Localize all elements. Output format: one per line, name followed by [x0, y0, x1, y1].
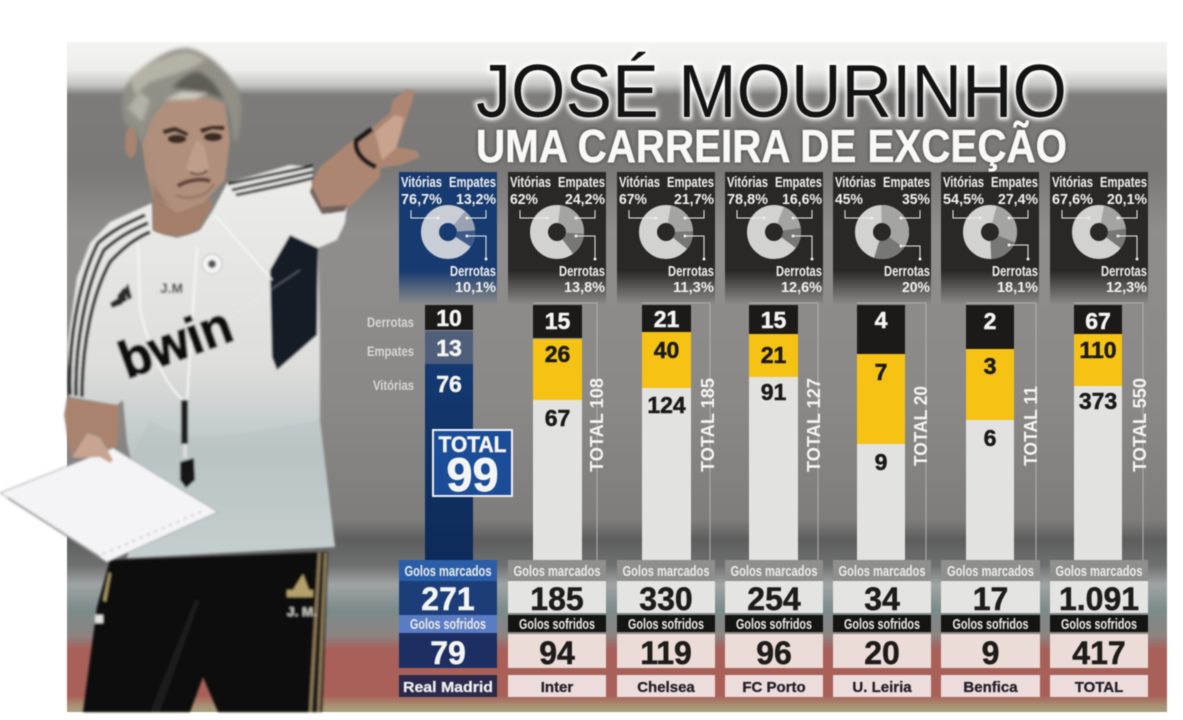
- column: Total donut panel: 20,1%: [1107, 192, 1147, 208]
- bar: FC Porto: TOTAL 127: [804, 378, 824, 472]
- bar: Real Madrid: 76: [436, 371, 462, 397]
- column: FC Porto donut panel: Empates: [775, 175, 822, 191]
- bar: U. Leiria: [857, 303, 931, 560]
- column: FC Porto donut panel: 12,6%: [781, 280, 822, 296]
- column: Chelsea donut panel: 11,3%: [673, 280, 714, 296]
- bar: Total: 67: [1085, 308, 1111, 334]
- goals table: Chelsea: Chelsea: [637, 679, 695, 696]
- column: FC Porto donut panel: 16,6%: [782, 192, 822, 208]
- bar: Benfica: [966, 303, 1041, 560]
- value: vitórias: 76,7%: [401, 192, 442, 208]
- total badge: TOTAL: [438, 432, 506, 457]
- column: Benfica donut panel: 54,5%: [943, 192, 984, 208]
- column: Chelsea donut panel: [617, 172, 715, 305]
- goals table: Total: 1.091: [1059, 581, 1139, 617]
- bar: U. Leiria: TOTAL 20: [911, 386, 931, 466]
- column: FC Porto donut panel: 78,8%: [727, 192, 768, 208]
- column: U. Leiria donut panel: Vitórias: [835, 175, 876, 191]
- photo: José Mourinho: [0, 48, 420, 712]
- column: Inter donut panel: Derrotas: [559, 264, 605, 280]
- bar: U. Leiria: 7: [875, 359, 887, 385]
- column: U. Leiria donut panel: 20%: [902, 280, 930, 296]
- goals table: Total: Golos marcados: [1056, 564, 1142, 580]
- shirt logos: [110, 283, 132, 308]
- column: Chelsea donut panel: 21,7%: [674, 192, 714, 208]
- goals table: Real Madrid: 79: [430, 635, 466, 671]
- hair: [122, 48, 241, 145]
- label: vitórias: Vitórias: [401, 175, 442, 191]
- bar: Total: [1074, 303, 1150, 560]
- goals table: Chelsea: Golos marcados: [622, 564, 710, 580]
- goals table: Inter: Golos sofridos: [519, 617, 595, 633]
- pants: J. M.: [287, 605, 317, 619]
- column: Chelsea donut panel: Vitórias: [619, 175, 660, 191]
- ear: [125, 126, 137, 158]
- goals table: FC Porto: Golos sofridos: [736, 617, 812, 633]
- goals table: Benfica: [941, 560, 1040, 697]
- column: U. Leiria donut panel: 45%: [835, 192, 863, 208]
- value: empates: 13,2%: [456, 192, 496, 208]
- bar: Chelsea: 124: [647, 392, 686, 418]
- total badge: [433, 430, 512, 501]
- column: U. Leiria donut panel: Derrotas: [884, 264, 930, 280]
- column: Real Madrid donut panel: [399, 172, 497, 305]
- title: JOSÉ MOURINHO: [476, 49, 1067, 133]
- column: Total donut panel: Derrotas: [1101, 264, 1147, 280]
- subtitle: UMA CARREIRA DE EXCEÇÃO: [476, 120, 1067, 172]
- shirt: bwin: [111, 296, 240, 390]
- goals table: Total: Golos sofridos: [1061, 617, 1137, 633]
- goals table: Real Madrid: 271: [421, 581, 475, 617]
- bar: FC Porto: [749, 303, 824, 560]
- shirt: [67, 165, 347, 558]
- column: Total donut panel: [1050, 172, 1148, 305]
- bar: Benfica: 6: [984, 425, 996, 451]
- goals table: FC Porto: 96: [756, 635, 792, 671]
- shirt: J.M: [160, 280, 183, 296]
- bar: Chelsea: 21: [654, 306, 679, 332]
- value: derrotas: 10,1%: [455, 280, 496, 296]
- goals table: Inter: 94: [539, 635, 575, 671]
- goals table: Benfica: 17: [973, 581, 1008, 617]
- bar: Real Madrid: 13: [436, 335, 462, 361]
- goals table: Chelsea: 330: [639, 581, 693, 617]
- column: Inter donut panel: 62%: [510, 192, 538, 208]
- column: Benfica donut panel: 18,1%: [997, 280, 1038, 296]
- goals table: Benfica: Golos sofridos: [952, 617, 1028, 633]
- column: U. Leiria donut panel: 35%: [902, 192, 930, 208]
- legend: derrotas, empates, vitórias: Empates: [367, 343, 414, 359]
- goals table: U. Leiria: Golos marcados: [838, 564, 926, 580]
- bar: Chelsea: 40: [654, 337, 679, 363]
- column: Benfica donut panel: 27,4%: [998, 192, 1038, 208]
- face: [142, 92, 230, 213]
- bar: Inter: 26: [545, 341, 570, 367]
- title: JOSÉ MOURINHO: [476, 49, 1067, 133]
- goals table: U. Leiria: 34: [864, 581, 900, 617]
- goals table: U. Leiria: U. Leiria: [852, 679, 912, 696]
- column: Total donut panel: 67,6%: [1052, 192, 1093, 208]
- bar: Chelsea: TOTAL 185: [698, 378, 718, 472]
- bar: FC Porto: 21: [761, 342, 786, 368]
- bar: Benfica: TOTAL 11: [1021, 386, 1041, 466]
- bar: U. Leiria: 4: [875, 307, 888, 333]
- goals table: Chelsea: [617, 560, 715, 697]
- bar: U. Leiria: 9: [875, 449, 887, 475]
- bar: Inter: 15: [545, 308, 570, 334]
- column: FC Porto donut panel: Derrotas: [776, 264, 822, 280]
- column: Benfica donut panel: Vitórias: [943, 175, 984, 191]
- bar: Real Madrid: [425, 305, 512, 560]
- column: Benfica donut panel: [941, 172, 1039, 305]
- label: empates: Empates: [449, 175, 496, 191]
- bar: Inter: 67: [545, 405, 570, 431]
- bar: FC Porto: 91: [761, 379, 786, 405]
- right arm and hand: [310, 89, 420, 214]
- goals table: Chelsea: 119: [640, 635, 692, 671]
- column: Chelsea donut panel: 67%: [619, 192, 647, 208]
- column: Benfica donut panel: Empates: [991, 175, 1038, 191]
- bar: FC Porto: 15: [761, 307, 786, 333]
- bar: Total: TOTAL 550: [1130, 378, 1150, 472]
- pants: [83, 552, 328, 712]
- bar: Inter: [533, 303, 607, 560]
- goals table: Chelsea: Golos sofridos: [628, 617, 704, 633]
- column: Total donut panel: Vitórias: [1052, 175, 1093, 191]
- goals table: Real Madrid: Golos sofridos: [410, 617, 486, 633]
- goals table: FC Porto: Golos marcados: [730, 564, 818, 580]
- column: Inter donut panel: [508, 172, 606, 305]
- column: Total donut panel: Empates: [1100, 175, 1147, 191]
- goals table: Total: [1050, 560, 1148, 697]
- goals table: Inter: Golos marcados: [514, 564, 600, 580]
- bar: Total: 373: [1079, 388, 1117, 414]
- bar: Inter: TOTAL 108: [587, 378, 607, 472]
- legend: derrotas, empates, vitórias: Vitórias: [373, 377, 414, 393]
- subtitle: UMA CARREIRA DE EXCEÇÃO: [476, 120, 1067, 172]
- legend: derrotas, empates, vitórias: Derrotas: [367, 314, 414, 330]
- label: derrotas: Derrotas: [450, 264, 496, 280]
- column: Inter donut panel: 24,2%: [565, 192, 605, 208]
- goals table: Inter: [508, 560, 606, 697]
- goals table: Inter: Inter: [541, 679, 573, 696]
- goals table: U. Leiria: 20: [864, 635, 900, 671]
- column: U. Leiria donut panel: Empates: [883, 175, 930, 191]
- goals table: U. Leiria: [833, 560, 931, 697]
- column: Chelsea donut panel: Derrotas: [668, 264, 714, 280]
- donut chart: [430, 214, 466, 250]
- column: U. Leiria donut panel: [833, 172, 931, 305]
- column: Total donut panel: 12,3%: [1106, 280, 1147, 296]
- goals table: Benfica: Benfica: [963, 679, 1018, 696]
- goals table: Real Madrid: [399, 560, 497, 697]
- column: Chelsea donut panel: Empates: [667, 175, 714, 191]
- bar: Benfica: 3: [984, 353, 996, 379]
- bar: Benfica: 2: [984, 308, 996, 334]
- neck: [153, 190, 213, 236]
- goals table: U. Leiria: Golos sofridos: [844, 617, 920, 633]
- column: Inter donut panel: 13,8%: [564, 280, 605, 296]
- goals table: Benfica: 9: [982, 635, 999, 671]
- total badge: 99: [446, 448, 499, 501]
- goals table: Inter: 185: [530, 581, 584, 617]
- column: FC Porto donut panel: [725, 172, 823, 305]
- column: Benfica donut panel: Derrotas: [992, 264, 1038, 280]
- goals table: Real Madrid: Real Madrid: [403, 679, 493, 696]
- goals table: Total: TOTAL: [1075, 679, 1123, 696]
- eyebrows and eyes: [163, 126, 224, 198]
- head: [122, 48, 241, 213]
- column: FC Porto donut panel: Vitórias: [727, 175, 768, 191]
- column: Inter donut panel: Empates: [558, 175, 605, 191]
- bar: Chelsea: [642, 303, 718, 560]
- left forearm: [64, 398, 119, 460]
- goals table: Real Madrid: Golos marcados: [404, 564, 492, 580]
- legend: derrotas, empates, vitórias: [367, 314, 414, 393]
- goals table: FC Porto: 254: [747, 581, 801, 617]
- bar: Real Madrid: 10: [436, 305, 462, 331]
- goals table: FC Porto: FC Porto: [742, 679, 806, 696]
- clipboard: [0, 433, 218, 562]
- bar: Total: 110: [1079, 337, 1117, 363]
- column: Inter donut panel: Vitórias: [510, 175, 551, 191]
- goals table: Total: 417: [1072, 635, 1126, 671]
- goals table: Benfica: Golos marcados: [947, 564, 1034, 580]
- goals table: FC Porto: [725, 560, 823, 697]
